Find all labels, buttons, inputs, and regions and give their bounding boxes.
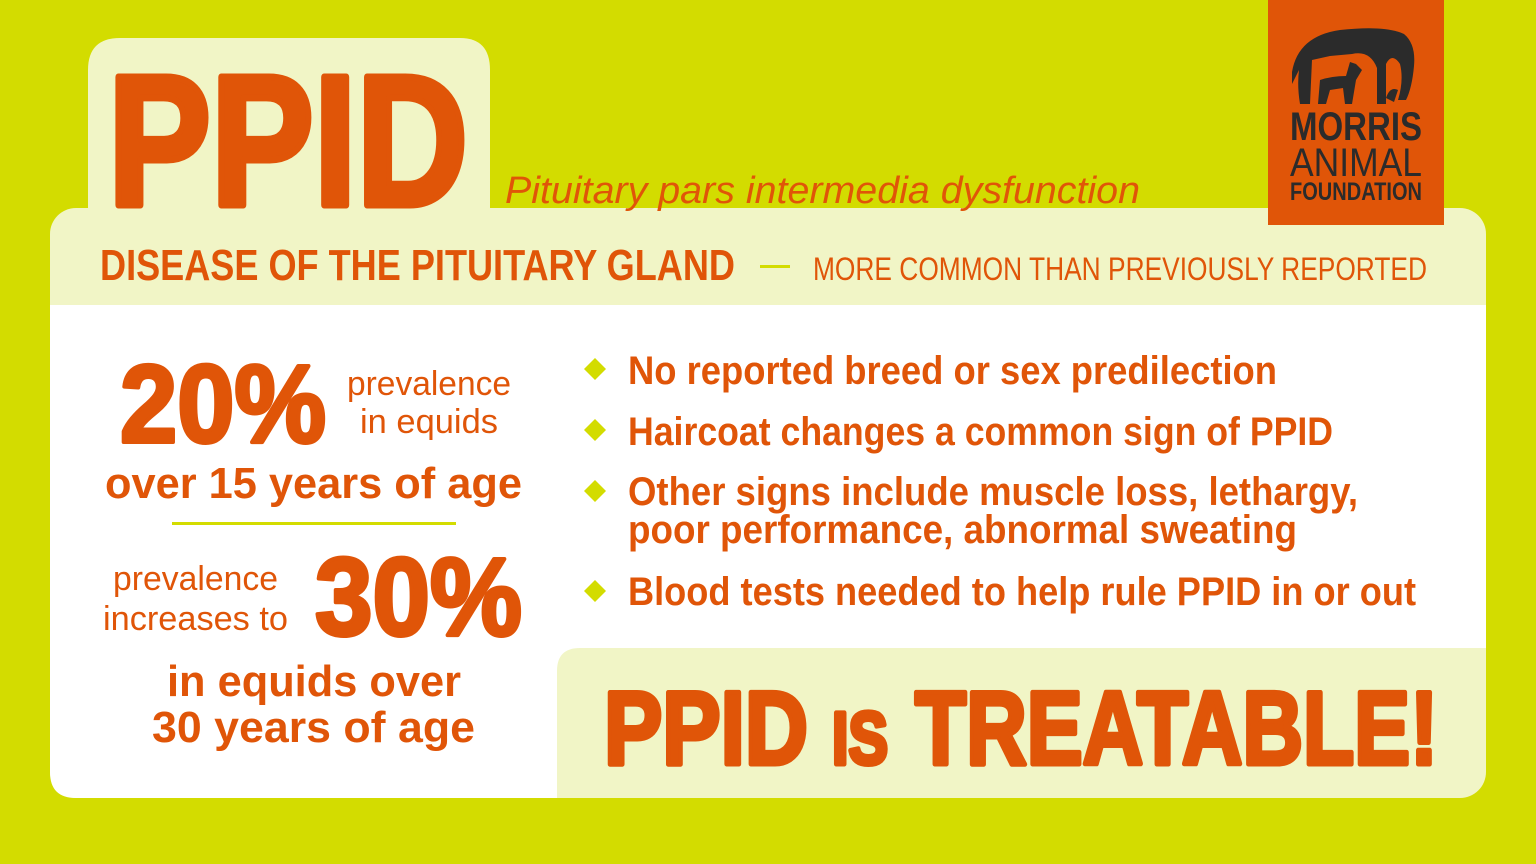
logo: FOUNDATION <box>1290 178 1422 206</box>
callout: PPID is treatable <box>604 671 1438 787</box>
logo: ANIMAL <box>1290 141 1422 185</box>
header band text: DISEASE OF THE PITUITARY GLAND <box>100 241 735 290</box>
stats panel: in equids <box>360 403 498 441</box>
stats panel: in equids over <box>167 657 461 706</box>
bullet list: No reported breed or sex predilection <box>628 349 1277 393</box>
stats panel: prevalence <box>347 365 511 403</box>
logo text: MORRIS <box>1290 105 1422 149</box>
stats panel: 30 years of age <box>152 703 475 752</box>
subtitle: Pituitary pars intermedia dysfunction <box>505 170 1140 212</box>
stats panel: 20% <box>120 343 326 466</box>
stats panel: 30% <box>315 536 522 659</box>
stats panel <box>103 343 522 752</box>
callout: PPID is treatable: PPID <box>604 671 808 787</box>
title: PPID: PPID <box>108 38 468 245</box>
icon: animals silhouette <box>1292 28 1414 104</box>
callout: PPID is treatable: IS <box>832 697 888 780</box>
stats panel: increases to <box>103 600 288 638</box>
bullet list <box>584 349 1416 614</box>
stats panel: over 15 years of age <box>105 459 522 508</box>
bullet list: Haircoat changes a common sign of PPID <box>628 410 1333 454</box>
bullet list: Other signs include muscle loss, lethargy, <box>628 470 1358 514</box>
bullet list: poor performance, abnormal sweating <box>628 508 1297 552</box>
title backdrop <box>88 38 490 215</box>
bullet list: Blood tests needed to help rule PPID in or out <box>628 570 1416 614</box>
main card <box>50 208 1486 798</box>
logo <box>1268 0 1444 225</box>
stats panel: prevalence <box>113 560 278 598</box>
header band text <box>100 241 1427 290</box>
